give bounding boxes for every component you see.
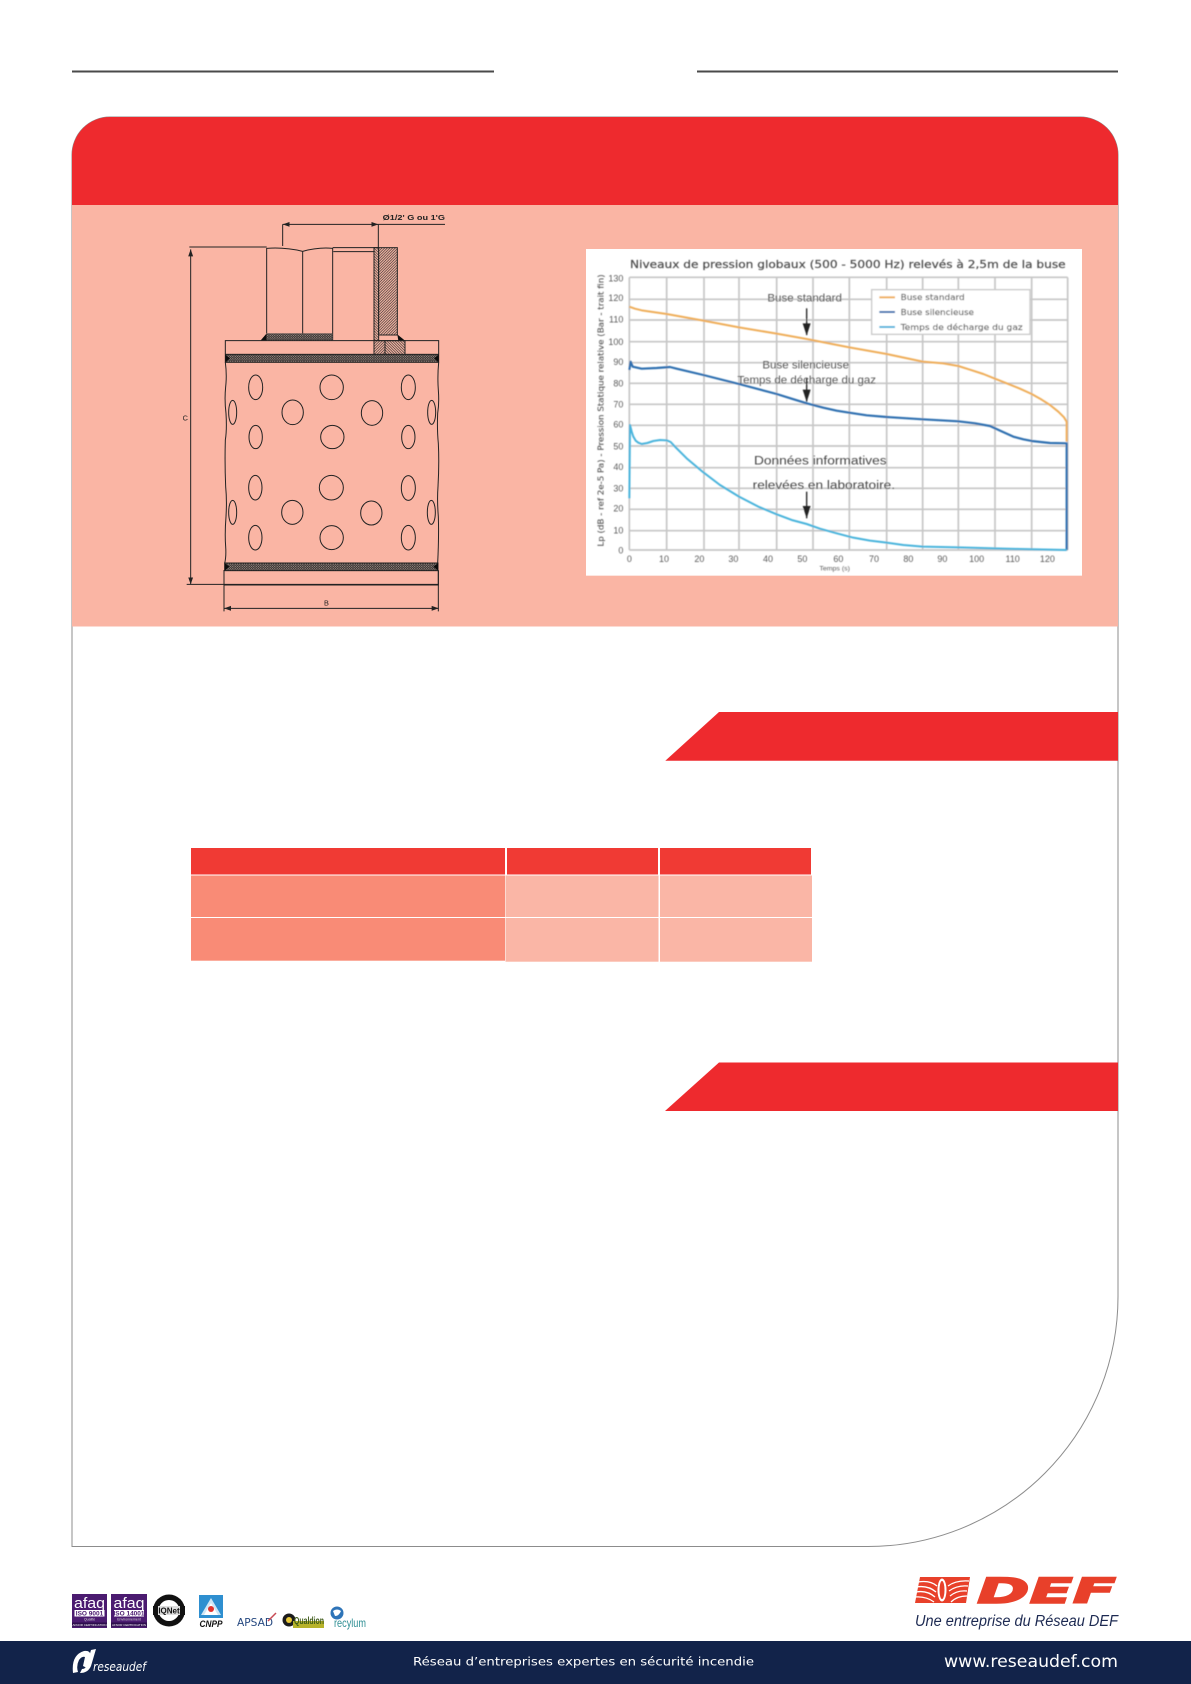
y axis: 120 (608, 293, 623, 303)
table row 2 (191, 918, 812, 962)
y axis: 40 (613, 462, 623, 472)
section banner 1 (665, 712, 1118, 761)
x axis: 110 (1005, 554, 1020, 564)
curve: buse silencieuse (629, 362, 1067, 550)
curve: temps de decharge du gaz (629, 425, 1067, 550)
y axis: 100 (608, 337, 623, 347)
y axis: 90 (613, 357, 623, 367)
chart: pressure levels over time (586, 249, 1082, 576)
logo: CNPP: CNPP (200, 1619, 223, 1630)
table header (191, 848, 811, 874)
annotation: donnees informatives: relevées en laboratoire. (753, 478, 895, 492)
y axis: 80 (613, 379, 623, 389)
dimension: height C: C (183, 414, 189, 423)
annotation: buse silencieuse: Temps de décharge du gaz (737, 375, 876, 387)
logo: Qualdion: Qualdion (294, 1616, 324, 1627)
panel: page frame (72, 117, 1118, 1546)
y axis (596, 273, 623, 555)
logo: afaq ISO 9001: afaq (74, 1595, 105, 1612)
section banner 2 (665, 1062, 1118, 1111)
certification logos (72, 1594, 366, 1630)
logo: reseaudef (73, 1649, 148, 1674)
legend: Temps de décharge du gaz (900, 322, 1023, 332)
logo wordmark: DEF (977, 1572, 1116, 1612)
y axis: 110 (609, 315, 623, 325)
logo: reseaudef: reseaudef (93, 1660, 148, 1674)
logo: APSAD (237, 1613, 276, 1629)
x axis: 20 (694, 554, 704, 564)
legend: Buse standard (901, 292, 965, 302)
panel: red title band (72, 117, 1118, 205)
header rules (72, 70, 1118, 72)
nozzle hex connector (261, 248, 405, 355)
annotation: buse standard: Buse standard (767, 292, 842, 304)
DEF brand logo (915, 1572, 1119, 1630)
dimension: thread diameter: Ø1/2' G ou 1'G (383, 213, 445, 222)
bottom plate (224, 563, 438, 585)
dimension: width B: B (324, 598, 329, 607)
x axis: 0 (627, 554, 632, 564)
x axis: 80 (903, 554, 913, 564)
logo: CNPP (199, 1595, 223, 1630)
footer band (0, 1641, 1191, 1684)
curve: buse standard (629, 307, 1067, 442)
chart grid (629, 277, 1068, 550)
logo: afaq ISO 14001: Environnement (117, 1618, 141, 1622)
table row 1 (191, 876, 812, 917)
x axis: Temps (s) (819, 566, 850, 573)
logo: Recylum (330, 1606, 366, 1630)
x axis: 90 (937, 554, 947, 564)
annotation: buse standard (767, 292, 842, 336)
logo: IQNet: IQNet (158, 1606, 180, 1616)
dimension: thread diameter (283, 213, 445, 248)
y axis: 60 (613, 419, 623, 429)
x axis: 60 (833, 554, 843, 564)
logo: afaq ISO 14001 (111, 1594, 147, 1628)
logo: Recylum: recylum (334, 1616, 366, 1630)
y axis: 130 (608, 273, 623, 283)
logo: afaq ISO 14001: AFNOR CERTIFICATION (112, 1623, 146, 1627)
table (191, 848, 812, 962)
y axis: 0 (618, 545, 623, 555)
x axis: 30 (728, 554, 738, 564)
y axis: 10 (613, 525, 623, 535)
x axis: 120 (1040, 554, 1055, 564)
x axis (627, 554, 1055, 573)
panel: pink drawing area (72, 205, 1118, 626)
annotation: buse silencieuse: Buse silencieuse (762, 360, 849, 372)
footer tagline: Réseau d’entreprises expertes en sécurité incendie (413, 1654, 754, 1668)
dimension: height C (183, 247, 439, 584)
y axis: Lp (dB - ref 2e-5 Pa) - Pression Statique relative (Bar - trait fin) (596, 274, 605, 547)
logo tagline: Une entreprise du Réseau DEF (915, 1613, 1119, 1630)
logo: Qualdion (282, 1614, 324, 1628)
annotation: buse silencieuse (737, 360, 876, 402)
annotation: donnees informatives: Données informatives (754, 454, 887, 468)
x axis: 40 (763, 554, 773, 564)
legend (872, 290, 1030, 334)
x axis: 70 (869, 554, 879, 564)
technical drawing (183, 213, 445, 611)
y axis: 30 (613, 484, 623, 494)
logo: APSAD: APSAD (237, 1617, 273, 1629)
x axis: 10 (659, 554, 669, 564)
logo: afaq ISO 9001 (72, 1594, 107, 1628)
annotation: donnees informatives (753, 454, 895, 518)
legend: Buse silencieuse (901, 307, 974, 317)
logo: afaq ISO 9001: AFNOR CERTIFICATION (72, 1623, 107, 1627)
logo: afaq ISO 14001: ISO 14001 (113, 1611, 145, 1618)
top plate (225, 341, 439, 362)
y axis: 50 (613, 441, 623, 451)
logo: afaq ISO 9001: ISO 9001 (76, 1611, 104, 1618)
dimension: width B (224, 570, 439, 611)
logo: afaq ISO 14001: afaq (114, 1595, 144, 1612)
y axis: 20 (613, 504, 623, 514)
x axis: 100 (969, 554, 984, 564)
website: www.reseaudef.com (944, 1652, 1118, 1671)
logo: afaq ISO 9001: Qualité (84, 1618, 95, 1622)
perforated body (225, 362, 439, 563)
logo: IQNet (153, 1594, 185, 1626)
chart title: Niveaux de pression globaux (500 - 5000 Hz) relevés à 2,5m de la buse (630, 258, 1066, 271)
y axis: 70 (613, 399, 623, 409)
logo mark: stripes (915, 1577, 970, 1603)
x axis: 50 (797, 554, 807, 564)
